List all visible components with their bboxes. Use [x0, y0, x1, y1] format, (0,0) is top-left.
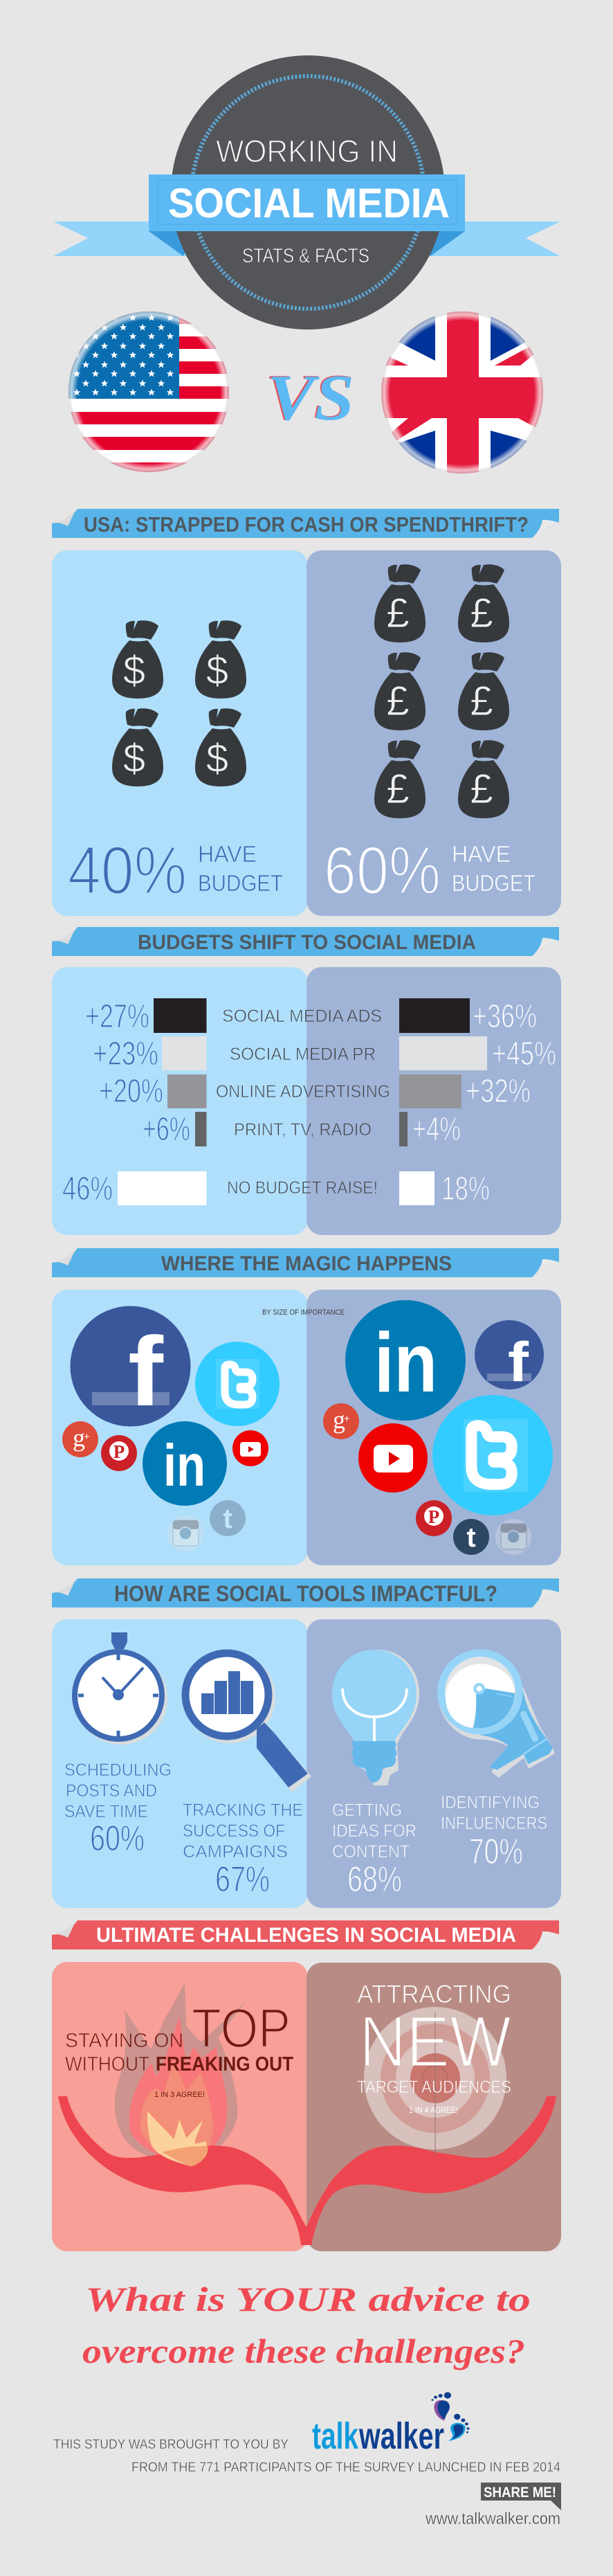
callout: advice question: overcome these challenges? [82, 2332, 525, 2370]
row: social media ads [85, 998, 537, 1035]
text: scheduling posts: POSTS AND [66, 1781, 157, 1801]
icon: twitter [432, 1395, 553, 1515]
text: scheduling posts [64, 1760, 172, 1859]
stat: 1 in 3 agree: 1 IN 3 AGREE! [154, 2091, 205, 2099]
icon: pound bag [458, 740, 509, 818]
row: social media pr: SOCIAL MEDIA PR [230, 1045, 376, 1064]
text: tracking campaigns [183, 1801, 303, 1900]
bar chart: USA and UK [62, 998, 556, 1207]
text: getting ideas [332, 1801, 417, 1900]
title banner [149, 174, 465, 231]
text: tracking campaigns: TRACKING THE [183, 1801, 303, 1820]
icon: pound bag [458, 564, 509, 642]
section 3: social networks [52, 1248, 561, 1565]
vs label: VS [267, 362, 354, 434]
icon: pinterest: P [428, 1506, 439, 1527]
icon: google plus: + [84, 1431, 90, 1443]
row: no budget raise [62, 1171, 490, 1207]
icon: pound bag: £ [386, 590, 410, 636]
heading: ultimate challenges: ULTIMATE CHALLENGES IN SOCIAL MEDIA [96, 1924, 516, 1947]
stat: 60 percent: 60% [324, 832, 441, 908]
icon: dollar bag [195, 620, 246, 699]
panel: left challenge [52, 1962, 308, 2251]
icon: tumblr faded [210, 1500, 246, 1536]
icon: dollar bag: $ [123, 736, 145, 781]
panel: UK budget [306, 550, 561, 916]
icon: pound bag [458, 652, 509, 730]
icon: linkedin [143, 1421, 227, 1506]
icon: twitter [195, 1342, 280, 1426]
panel: right challenge [306, 1963, 561, 2251]
icon: facebook [475, 1320, 544, 1394]
dotted ring [192, 76, 424, 309]
text: identifying influencers: IDENTIFYING [441, 1793, 540, 1812]
label: have budget: HAVE [452, 841, 511, 867]
icon: dollar bag: $ [206, 648, 228, 693]
text: tracking campaigns: 67% [215, 1859, 270, 1900]
label: have budget: BUDGET [198, 870, 283, 896]
link: website: www.talkwalker.com [425, 2510, 560, 2528]
row: social media pr [93, 1036, 556, 1072]
icon: facebook [71, 1306, 191, 1427]
icon: dollar bag: $ [123, 648, 145, 693]
icon: google plus: g [73, 1424, 85, 1452]
icon: pound bag: £ [470, 590, 493, 636]
row: social media ads: +36% [473, 998, 537, 1035]
icon: youtube [232, 1430, 268, 1466]
icon: instagram faded [167, 1515, 203, 1551]
icon: pound bag [374, 740, 426, 818]
icon: dollar bag [112, 620, 163, 699]
text: identifying influencers: 70% [469, 1832, 523, 1872]
row: social media ads: +27% [85, 998, 149, 1035]
icon: facebook: f [508, 1331, 529, 1394]
bubbles: UK [323, 1300, 553, 1555]
button: share me [481, 2483, 561, 2510]
vs label: VS [265, 361, 354, 433]
label: have budget [452, 841, 536, 896]
text: getting ideas: 68% [347, 1859, 402, 1900]
row: online advertising [99, 1073, 531, 1110]
row: no budget raise: NO BUDGET RAISE! [227, 1178, 378, 1198]
icon: pinterest [101, 1435, 137, 1471]
heading: ultimate challenges [52, 1920, 559, 1949]
icon: light bulb [332, 1650, 419, 1785]
row: print tv radio [143, 1111, 461, 1148]
icon: facebook: f [128, 1317, 164, 1427]
heading: how are social tools impactful: HOW ARE SOCIAL TOOLS IMPACTFUL? [114, 1581, 497, 1606]
icon: tumblr [453, 1519, 489, 1555]
text: study credit: THIS STUDY WAS BROUGHT TO YOU BY [53, 2438, 289, 2452]
row: social media pr: +45% [492, 1036, 556, 1072]
row: print tv radio: +4% [412, 1111, 461, 1148]
row: social media pr: +23% [93, 1036, 158, 1072]
icon: google plus [323, 1403, 359, 1439]
row: online advertising: ONLINE ADVERTISING [216, 1082, 390, 1101]
caption: by size of importance: BY SIZE OF IMPORTANCE [262, 1308, 345, 1317]
icon: google plus: g [333, 1406, 345, 1434]
panel: USA background [52, 1290, 308, 1565]
text: tracking campaigns: CAMPAIGNS [183, 1842, 288, 1862]
stat: 40 percent: 40% [68, 832, 187, 908]
heading: where the magic happens [52, 1248, 559, 1277]
logo: talkwalker: walker [358, 2415, 444, 2457]
icon: flame back [115, 1983, 246, 2166]
icon: instagram faded [495, 1519, 531, 1555]
icon: youtube [358, 1423, 428, 1493]
text: tracking campaigns: SUCCESS OF [183, 1821, 285, 1841]
row: no budget raise: 18% [441, 1171, 490, 1207]
text: scheduling posts: 60% [90, 1819, 145, 1859]
button: share me: SHARE ME! [484, 2485, 556, 2501]
subheading: stats and facts: STATS & FACTS [242, 245, 369, 267]
dark circle badge [171, 55, 445, 330]
heading: budgets shift: BUDGETS SHIFT TO SOCIAL MEDIA [138, 931, 476, 954]
label: have budget: HAVE [198, 841, 257, 867]
text: getting ideas: IDEAS FOR [332, 1821, 417, 1841]
text: getting ideas: GETTING [332, 1801, 402, 1820]
icon: UK flag button [381, 312, 543, 474]
text: identifying influencers: INFLUENCERS [441, 1814, 547, 1833]
icon: pound bag: £ [470, 678, 493, 724]
panel: USA background [52, 967, 308, 1235]
text: getting ideas: CONTENT [332, 1842, 410, 1862]
icon: google plus [62, 1421, 98, 1457]
text: staying on top [65, 2009, 293, 2071]
icon: flame core [147, 2111, 208, 2166]
icon: USA flag button [68, 312, 230, 473]
icon: stopwatch [75, 1632, 167, 1745]
icon: tumblr faded: t [223, 1504, 232, 1534]
swoosh: open book shape [58, 2096, 556, 2245]
ribbon tails [53, 222, 560, 256]
icon: pound bag: £ [470, 766, 493, 812]
icon: linkedin [345, 1300, 466, 1421]
label: have budget [198, 841, 283, 896]
icon: linkedin: in [374, 1315, 437, 1409]
text: scheduling posts: SCHEDULING [64, 1760, 172, 1780]
panel: UK background [306, 1619, 561, 1908]
icon: google plus: + [344, 1413, 350, 1425]
heading: social media: SOCIAL MEDIA [168, 180, 450, 226]
icon: tumblr: t [466, 1522, 476, 1553]
row: no budget raise: 46% [62, 1171, 113, 1207]
panel: USA budget [52, 550, 308, 916]
text: identifying influencers [441, 1793, 547, 1872]
row: social media ads: SOCIAL MEDIA ADS [222, 1007, 382, 1026]
title badge [53, 55, 560, 330]
text: scheduling posts: SAVE TIME [64, 1802, 148, 1821]
logo: talkwalker: talk [312, 2415, 359, 2457]
text: attracting new target audiences [357, 1985, 511, 2093]
heading: working in: WORKING IN [216, 134, 398, 169]
stat: 1 in 4 agree: 1 IN 4 AGREE! [409, 2105, 458, 2115]
section 4: tools [52, 1578, 561, 1908]
icon: target [364, 2007, 506, 2155]
bubbles: USA [62, 1306, 280, 1551]
icon: pound bag: £ [386, 766, 410, 812]
callout: advice question [82, 2280, 531, 2370]
icon: pinterest [416, 1500, 452, 1536]
row: online advertising: +32% [466, 1073, 531, 1110]
footer [53, 2392, 561, 2528]
icon: dollar bag [195, 708, 246, 786]
heading: strapped for cash: USA: STRAPPED FOR CASH OR SPENDTHRIFT? [84, 512, 529, 537]
icon: dollar bag: $ [206, 736, 228, 781]
panel: UK background [306, 967, 561, 1235]
logo: talkwalker [312, 2392, 470, 2457]
row: print tv radio: +6% [143, 1111, 190, 1148]
panel: UK background [306, 1290, 561, 1565]
callout: advice question: What is YOUR advice to [85, 2280, 531, 2318]
icon: pound bag [374, 652, 426, 730]
icon: pinterest: P [113, 1441, 125, 1462]
icon: magnifying glass with bars [184, 1652, 311, 1792]
heading: budgets shift [52, 927, 559, 956]
panel: USA background [52, 1619, 308, 1908]
text: participants: FROM THE 771 PARTICIPANTS OF THE SURVEY LAUNCHED IN FEB 2014 [131, 2460, 560, 2475]
icon: dollar bag [112, 708, 163, 786]
icon: megaphone [437, 1649, 555, 1778]
icon: pound bag [374, 564, 426, 642]
label: have budget: BUDGET [452, 870, 536, 896]
heading: where the magic happens: WHERE THE MAGIC HAPPENS [161, 1252, 452, 1275]
section 2: budget shift [52, 927, 561, 1235]
icon: linkedin: in [163, 1433, 205, 1499]
section 1: budget [52, 509, 561, 916]
row: online advertising: +20% [99, 1073, 163, 1110]
icon: pound bag: £ [386, 678, 410, 724]
section 5: challenges [52, 1920, 561, 2251]
row: print tv radio: PRINT, TV, RADIO [234, 1120, 372, 1140]
